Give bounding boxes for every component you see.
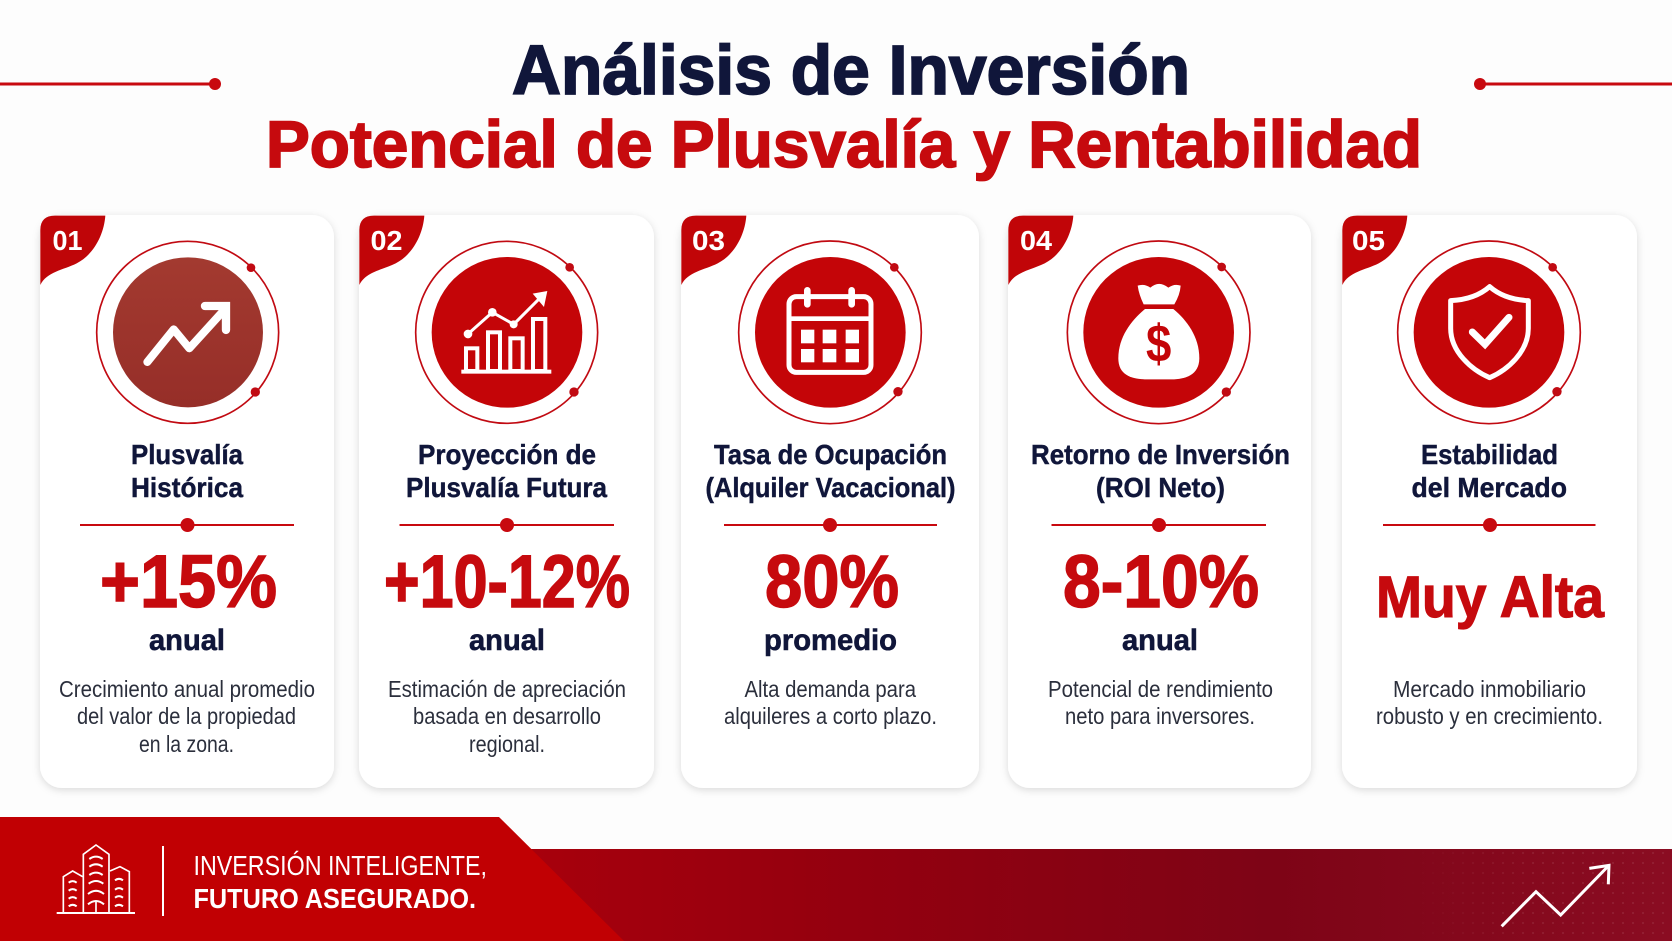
icon: money bag: $	[1146, 315, 1171, 374]
description	[724, 676, 937, 729]
heading	[706, 439, 956, 503]
badge 05: 05	[1352, 225, 1385, 256]
heading: Plusvalía Futura	[406, 472, 608, 503]
unit: anual	[1122, 624, 1198, 657]
description	[1376, 676, 1603, 729]
description: alquileres a corto plazo.	[724, 703, 937, 729]
panel: retorno de inversión	[1008, 215, 1311, 788]
description: regional.	[469, 731, 545, 757]
description: basada en desarrollo	[413, 703, 601, 729]
icon: rising arrow	[97, 241, 279, 423]
unit: anual	[149, 624, 225, 657]
title: Análisis de Inversión	[512, 31, 1190, 109]
vertical separator	[162, 846, 164, 916]
divider	[1383, 518, 1596, 532]
badge 03: 03	[692, 225, 725, 256]
tagline	[194, 850, 487, 914]
subtitle: Potencial de Plusvalía y Rentabilidad	[266, 107, 1422, 181]
panel: plusvalía histórica	[40, 215, 334, 788]
heading: Proyección de	[418, 439, 596, 470]
footer banner	[0, 817, 1672, 941]
tagline: FUTURO ASEGURADO.	[194, 883, 476, 914]
description: Alta demanda para	[744, 676, 916, 702]
description: Crecimiento anual promedio	[59, 676, 315, 702]
description	[388, 676, 626, 757]
badge 02: 02	[370, 225, 402, 256]
description: en la zona.	[139, 731, 234, 757]
heading: Histórica	[131, 472, 244, 503]
value: +15%	[100, 540, 277, 623]
value: 80%	[765, 540, 899, 623]
badge 03	[681, 216, 746, 285]
description: Mercado inmobiliario	[1393, 676, 1586, 702]
icon: bar chart with trend line	[416, 241, 598, 423]
heading	[406, 439, 608, 503]
heading: Retorno de Inversión	[1031, 439, 1290, 470]
icon: buildings	[57, 845, 135, 913]
divider	[1052, 518, 1266, 532]
icon: shield with check	[1398, 241, 1580, 424]
description: Estimación de apreciación	[388, 676, 626, 702]
panel: tasa de ocupación	[681, 215, 979, 788]
right decorative rule with dot	[1474, 78, 1672, 90]
value: Muy Alta	[1376, 565, 1605, 630]
heading: Estabilidad	[1421, 439, 1558, 470]
heading: del Mercado	[1412, 472, 1567, 503]
panel: estabilidad del mercado	[1342, 215, 1637, 788]
divider	[724, 518, 937, 532]
divider	[80, 518, 294, 532]
heading: (Alquiler Vacacional)	[706, 472, 956, 503]
description	[1048, 676, 1273, 729]
heading	[1031, 439, 1290, 503]
value: 8-10%	[1063, 540, 1259, 623]
divider	[400, 518, 614, 532]
badge 04	[1008, 216, 1073, 285]
description	[59, 676, 315, 757]
heading: Tasa de Ocupación	[714, 439, 947, 470]
badge 02	[359, 216, 424, 285]
tagline: INVERSIÓN INTELIGENTE,	[194, 850, 487, 881]
description: neto para inversores.	[1065, 703, 1255, 729]
value: +10-12%	[384, 540, 630, 623]
icon: money bag	[1067, 241, 1250, 424]
description: del valor de la propiedad	[77, 703, 296, 729]
badge 05	[1342, 216, 1407, 285]
unit: promedio	[764, 624, 897, 657]
description: robusto y en crecimiento.	[1376, 703, 1603, 729]
heading	[131, 439, 244, 503]
icon: calendar	[739, 241, 921, 424]
badge 01	[40, 216, 105, 285]
unit: anual	[469, 624, 545, 657]
heading: (ROI Neto)	[1096, 472, 1225, 503]
heading	[1412, 439, 1567, 503]
badge 01: 01	[52, 225, 82, 256]
icon: growth arrow	[1502, 865, 1609, 926]
heading: Plusvalía	[131, 439, 244, 470]
left decorative rule with dot	[0, 78, 221, 90]
panel: proyección de plusvalía futura	[359, 215, 654, 788]
badge 04: 04	[1020, 225, 1052, 256]
description: Potencial de rendimiento	[1048, 676, 1273, 702]
